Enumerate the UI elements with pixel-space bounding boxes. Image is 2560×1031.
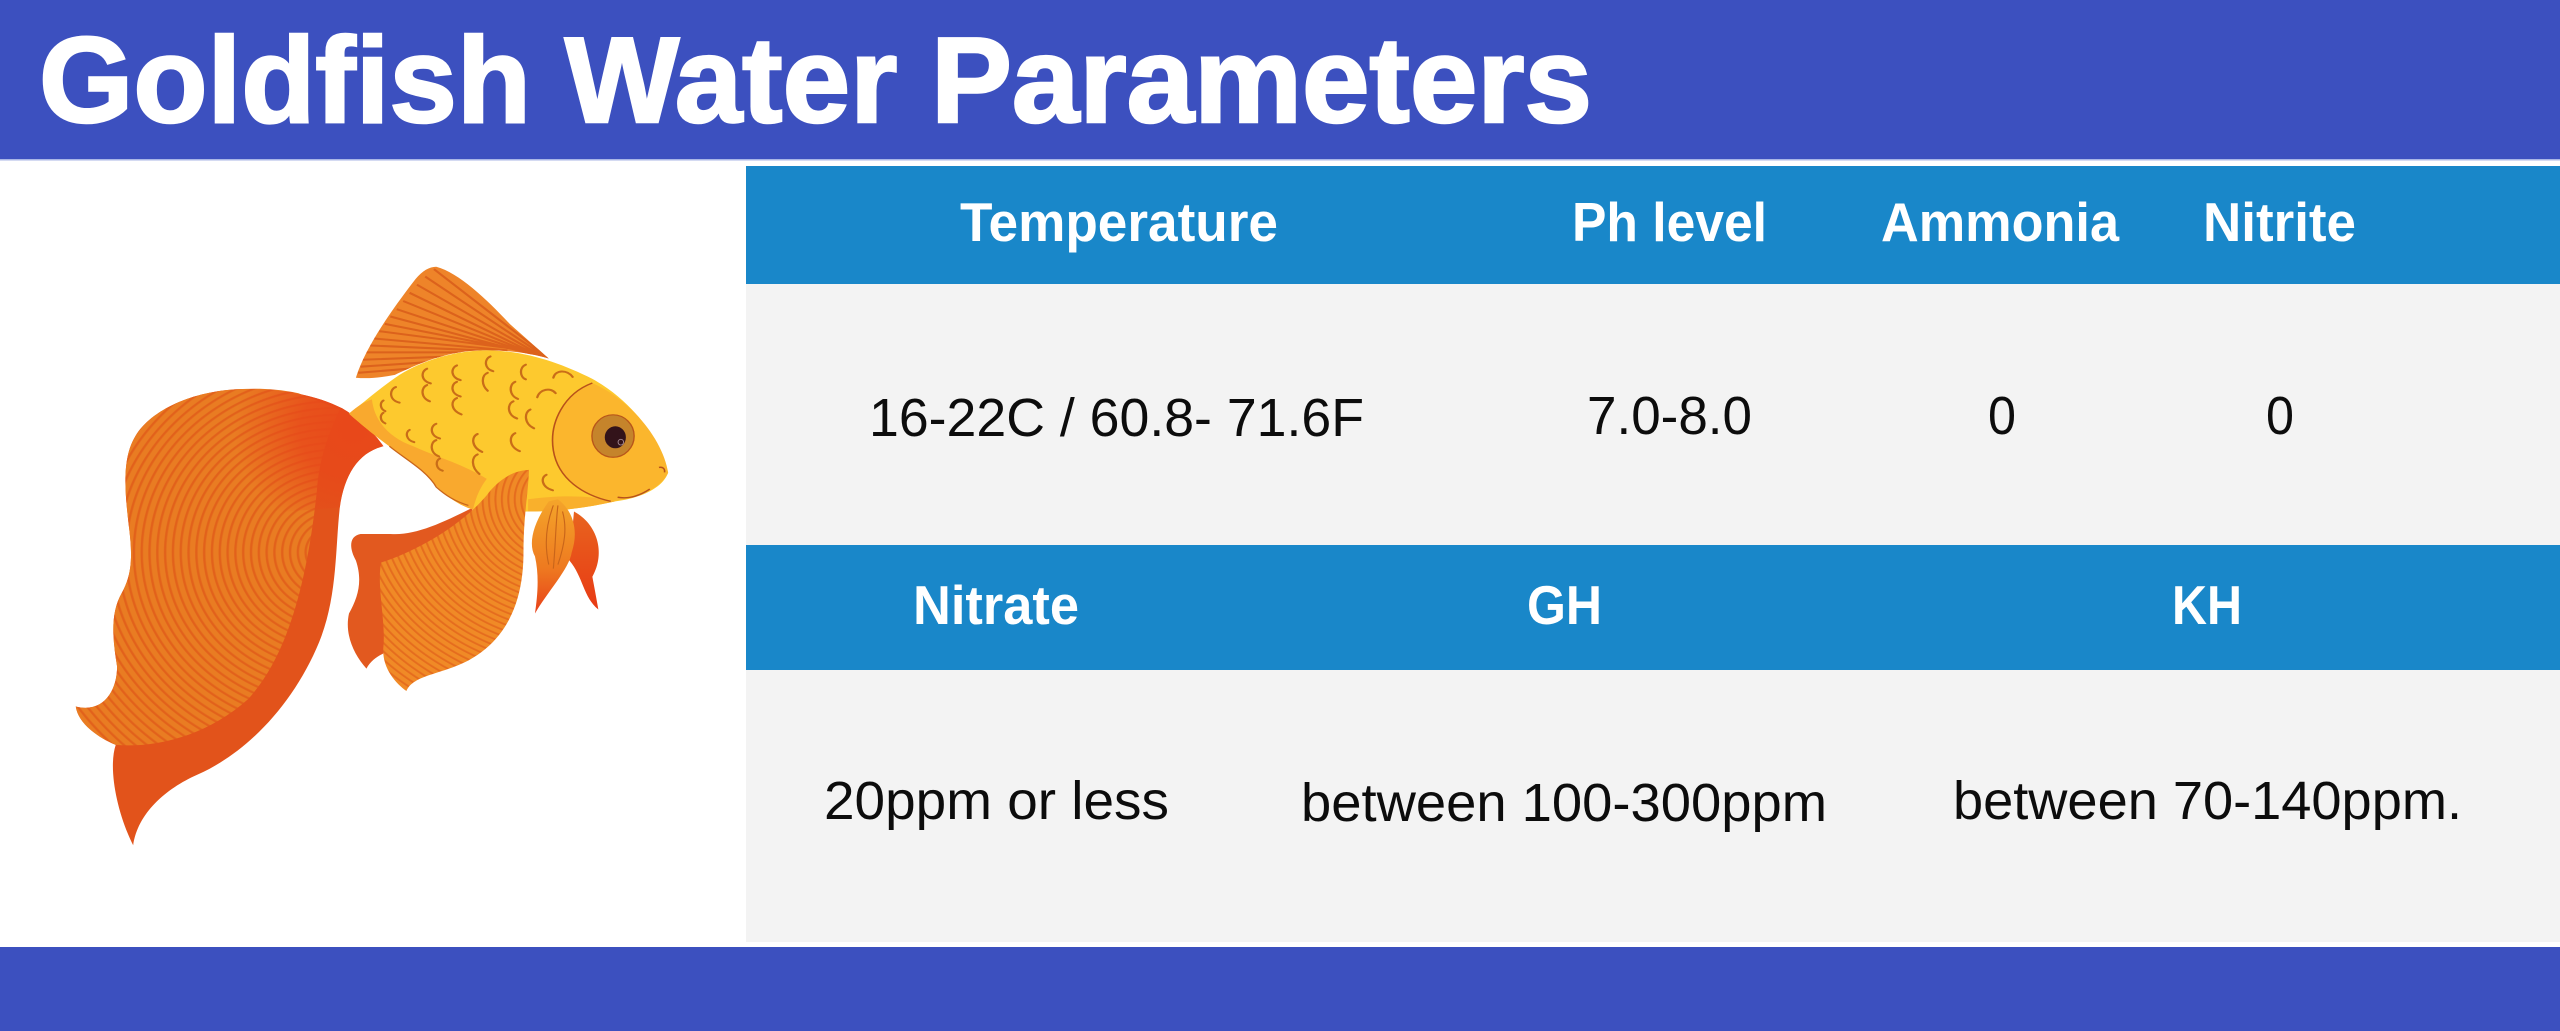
title: Goldfish Water Parameters xyxy=(39,12,1592,148)
dorsal fin xyxy=(356,267,551,378)
heading: gh: GH xyxy=(1527,574,1602,636)
scales xyxy=(381,356,573,490)
front pectoral fin xyxy=(532,499,575,614)
illustration: goldfish xyxy=(76,267,668,845)
heading: nitrite: Nitrite xyxy=(2203,191,2356,253)
heading: temperature: Temperature xyxy=(960,191,1278,253)
panel: parameter table xyxy=(746,166,2560,942)
heading: nitrate: Nitrate xyxy=(913,574,1079,636)
value: nitrate: 20ppm or less xyxy=(824,771,1169,831)
value: temperature: 16-22C / 60.8- 71.6F xyxy=(869,388,1364,448)
rear pectoral fin xyxy=(569,512,599,609)
rear ventral fin xyxy=(348,507,473,669)
value: gh: between 100-300ppm xyxy=(1301,773,1827,833)
row 2 header band xyxy=(746,545,2560,670)
front ventral fin xyxy=(380,470,529,691)
row 2 value panel xyxy=(746,670,2560,942)
eye xyxy=(592,415,634,457)
head and gill xyxy=(553,383,668,501)
value: ammonia: 0 xyxy=(1988,386,2016,446)
row 1 header band xyxy=(746,166,2560,284)
body xyxy=(349,350,668,512)
row 1 value panel xyxy=(746,284,2560,545)
heading: kh: KH xyxy=(2172,574,2242,636)
heading: ph level: Ph level xyxy=(1572,191,1767,253)
value: ph level: 7.0-8.0 xyxy=(1587,386,1752,446)
header banner xyxy=(0,0,2560,160)
tail fin xyxy=(76,389,383,845)
value: kh: between 70-140ppm. xyxy=(1953,771,2462,831)
footer banner xyxy=(0,947,2560,1031)
value: nitrite: 0 xyxy=(2266,386,2294,446)
heading: ammonia: Ammonia xyxy=(1881,191,2119,253)
